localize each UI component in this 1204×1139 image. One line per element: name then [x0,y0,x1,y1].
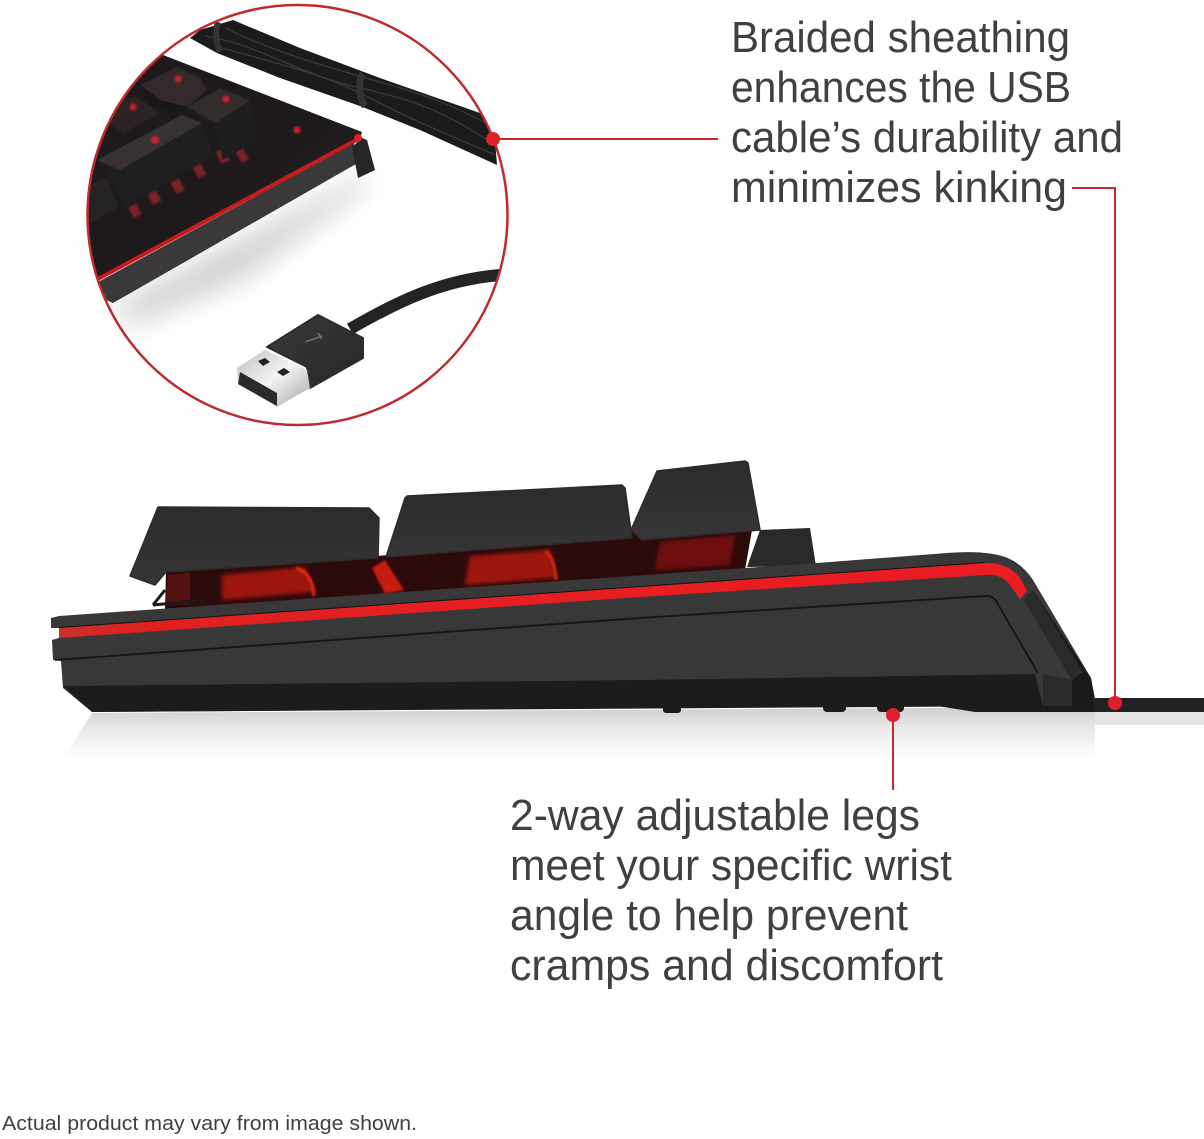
keycap 3 [631,461,760,540]
inset circle: USB cable close-up [60,5,508,425]
keyboard cable [1085,698,1204,712]
callout text: adjustable legs: angle to help prevent [510,891,908,940]
braided cable bundle [190,20,497,165]
footnote: Actual product may vary from image shown. [2,1113,417,1135]
soft shadow under keyboard edge [115,178,375,325]
leader line: adjustable legs [886,708,900,790]
red switch glow [128,147,249,218]
low keycap [747,528,816,567]
adjustable feet [663,703,1095,713]
key legend lights [130,76,300,144]
leader line: braided cable [486,132,718,146]
callout text: braided sheathing: minimizes kinking [731,163,1067,212]
body seam line [55,596,1038,673]
rear edge panel [1024,590,1095,706]
callout text: adjustable legs [510,791,952,990]
lower base band [63,674,1043,712]
keyboard body [51,552,1095,712]
keyboard corner foot [352,138,375,178]
callout text: braided sheathing: cable’s durability and [731,113,1123,162]
keycaps [98,67,250,194]
USB metal plug [237,350,310,407]
keyboard plate corner [88,55,362,277]
callout text: braided sheathing [731,13,1123,212]
keycap 1 [130,507,379,585]
callout text: braided sheathing: enhances the USB [731,63,1071,112]
red LED light bar [59,563,1027,638]
callout text: adjustable legs: 2-way adjustable legs [510,791,920,840]
keyboard side wall [95,143,356,303]
callout text: braided sheathing: Braided sheathing [731,13,1070,62]
side view keyboard [51,461,1204,713]
reflection under keyboard [62,707,1204,760]
red LED strip [98,138,360,279]
USB connector housing [267,315,363,388]
switch housing with red light [153,530,752,609]
keycap 2 [386,485,632,557]
callout text: adjustable legs: meet your specific wrist [510,841,952,890]
leader line: keyboard cable [1072,188,1122,710]
USB braided cable [350,275,500,329]
USB symbol [305,333,322,342]
callout text: adjustable legs: cramps and discomfort [510,941,943,990]
